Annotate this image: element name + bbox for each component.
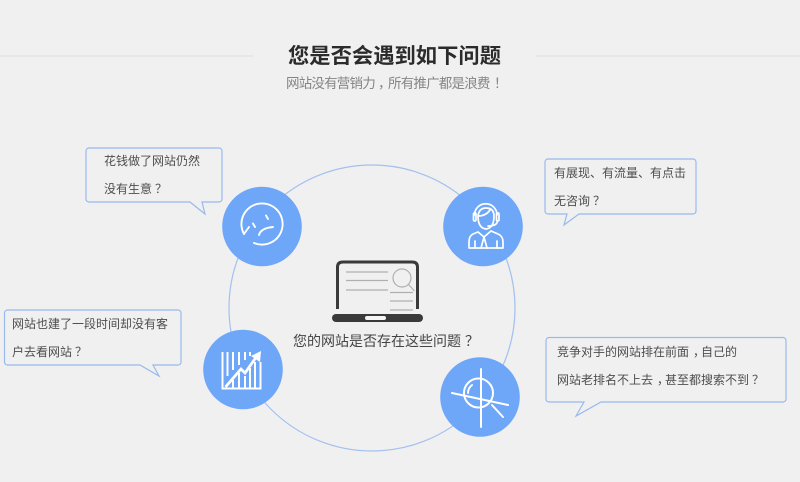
callout: top right: 无咨询？ <box>554 192 605 209</box>
central ring <box>229 165 515 451</box>
callout: top right: 有展现、有流量、有点击 <box>554 166 686 180</box>
icon: customer service agent <box>443 187 523 266</box>
icon: laptop with magnifier <box>332 262 423 322</box>
callout: bottom right: 竞争对手的网站排在前面 ，自己的 <box>557 343 737 360</box>
callout: bottom right: 网站老排名不上去 ，甚至都搜索不到？ <box>557 371 764 388</box>
subtitle: ！ <box>494 72 507 92</box>
callout: top left: 没有生意？ <box>104 180 167 197</box>
subtitle: 网站没有营销力 <box>286 76 375 91</box>
callout: bottom left <box>4 310 181 376</box>
icon: crosshair magnifier <box>440 357 520 437</box>
icon: growth chart <box>203 330 283 409</box>
title: 您是否会遇到如下问题 <box>288 45 501 68</box>
callout: top left <box>86 148 222 214</box>
callout: bottom right <box>546 338 786 416</box>
callout: bottom left: 网站也建了一段时间却没有客 <box>12 316 168 331</box>
central caption: 您的网站是否存在这些问题 ？ <box>293 331 479 351</box>
subtitle: ， <box>378 72 391 92</box>
callout: top right <box>545 159 696 225</box>
subtitle: 所有推广都是浪费 <box>388 76 490 91</box>
callout: top left: 花钱做了网站仍然 <box>104 153 200 168</box>
icon: sad face <box>222 187 302 266</box>
callout: bottom left: 户去看网站？ <box>12 343 87 360</box>
